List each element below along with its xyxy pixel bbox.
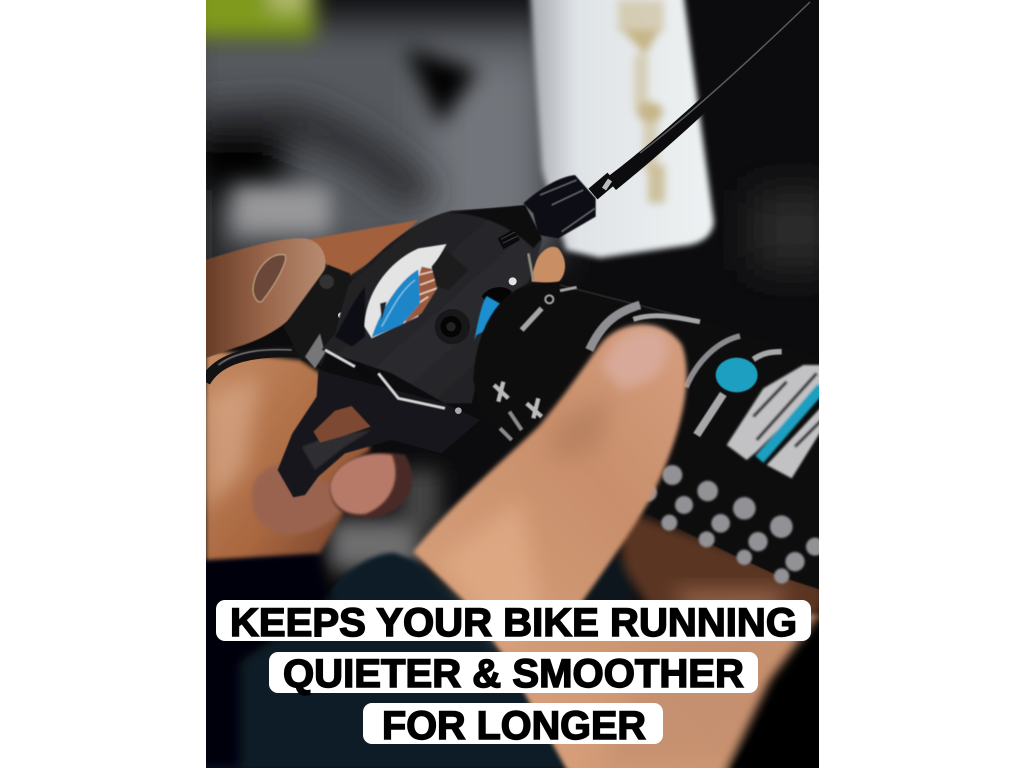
teal logo dot <box>716 358 758 392</box>
photo clipped to centre column <box>180 0 840 768</box>
finger two <box>330 453 412 518</box>
printed snowflake pattern <box>629 465 824 584</box>
grease tube <box>473 282 824 590</box>
cable left <box>205 351 303 382</box>
right thumb nail <box>602 329 668 390</box>
dark triangle <box>405 48 478 125</box>
finger one <box>252 464 345 535</box>
right-hand lower fingers <box>616 512 819 617</box>
thumbnail <box>253 255 286 302</box>
silver edge highlights <box>325 350 445 408</box>
bolt hole <box>435 309 470 344</box>
right hand and thumb <box>413 325 830 768</box>
blue grease port <box>482 287 512 304</box>
grease window <box>364 244 447 338</box>
caption line 1: KEEPS YOUR BIKE RUNNING <box>230 601 797 645</box>
brake lever <box>278 370 480 497</box>
printed crosses <box>494 382 542 440</box>
photo: background scene <box>180 0 840 768</box>
shifter clamp <box>283 265 352 367</box>
brake cable <box>593 0 816 194</box>
lever opening <box>313 406 371 443</box>
dark sleeve <box>200 553 570 768</box>
shifter, hand and finger details <box>205 175 596 497</box>
left thumb <box>205 238 326 358</box>
tube label <box>727 365 822 478</box>
caption <box>216 600 811 748</box>
caption line 2: QUIETER & SMOOTHER <box>283 652 744 696</box>
gray gap between hands <box>330 470 440 570</box>
left hand palm <box>206 350 412 560</box>
index finger behind shifter <box>295 220 418 277</box>
tube small text <box>522 287 782 435</box>
small port <box>498 229 520 249</box>
white bottle in background <box>530 0 714 258</box>
window cover <box>432 250 468 290</box>
right fingertip behind shifter <box>532 247 565 283</box>
barrel adjuster <box>523 175 596 238</box>
caption line 3: FOR LONGER <box>382 704 646 748</box>
shifter body <box>322 206 542 403</box>
